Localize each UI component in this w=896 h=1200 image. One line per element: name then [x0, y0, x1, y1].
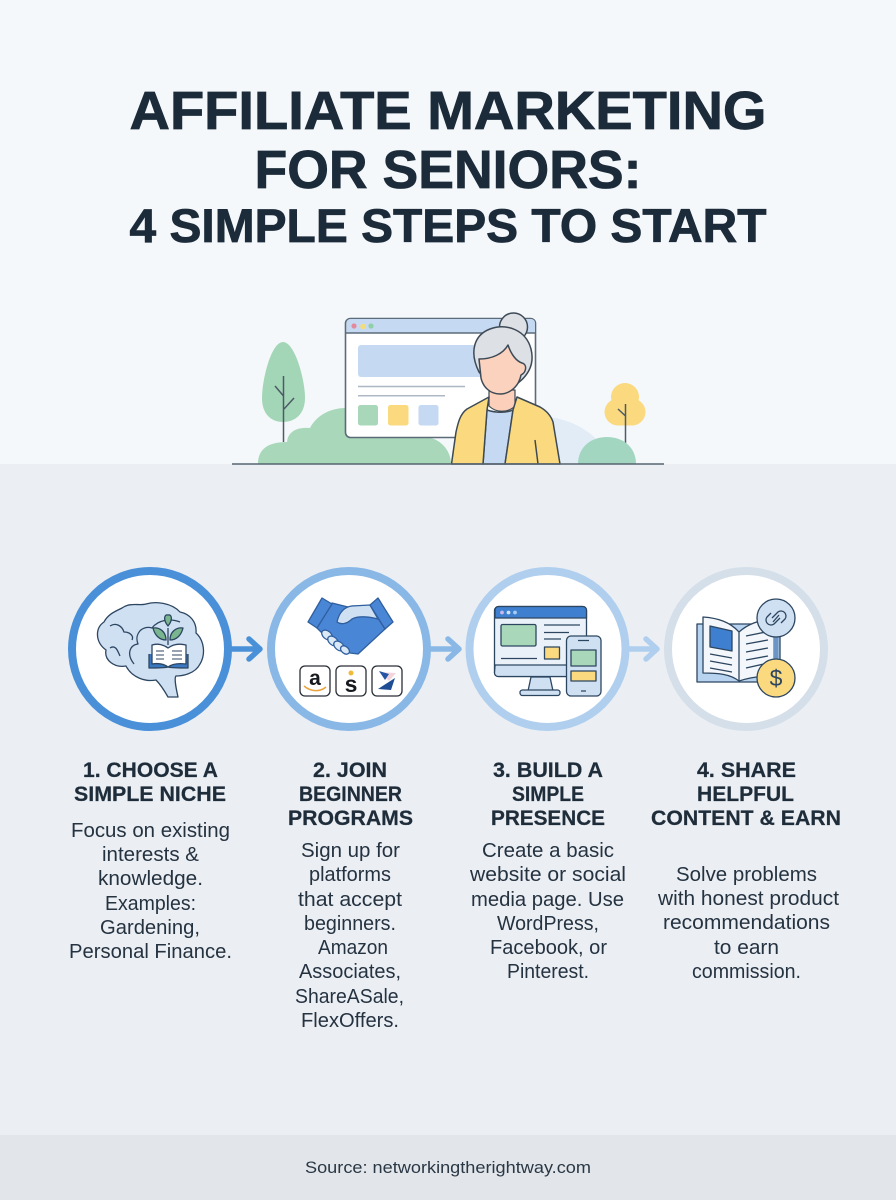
heading 2: 2. JOIN [313, 758, 387, 782]
body 1: Gardening, [100, 916, 200, 939]
body 1: interests & [102, 843, 199, 866]
tree left [262, 342, 305, 442]
icon: flexoffers logo [372, 666, 402, 696]
body 1: Personal Finance. [69, 940, 232, 963]
body 4: with honest product [657, 887, 839, 910]
heading 4 [651, 758, 841, 830]
heading 4: CONTENT & EARN [651, 806, 841, 830]
background: top panel [0, 0, 896, 464]
icon: amazon logo: a [309, 667, 321, 690]
body 3: Pinterest. [507, 960, 589, 983]
tree right [604, 383, 646, 443]
background: steps panel [0, 464, 896, 1135]
body 1 [69, 819, 232, 963]
body 2: FlexOffers. [301, 1009, 399, 1032]
icon: shareasale logo [336, 666, 366, 697]
illustration: senior woman with website [232, 313, 664, 464]
icon: book with link and dollar: $ [770, 665, 783, 691]
woman [452, 313, 560, 464]
circle 3 [470, 571, 626, 727]
title: FOR SENIORS: [254, 140, 642, 200]
step 2 [271, 571, 459, 1032]
footer band [0, 1135, 896, 1200]
body 3: Create a basic [482, 839, 614, 862]
icon: handshake [308, 598, 393, 656]
body 3: Facebook, or [490, 936, 607, 959]
body 2: Associates, [299, 960, 401, 983]
icon: monitor and phone [494, 606, 601, 696]
step 3 [469, 571, 657, 983]
browser window [346, 318, 536, 438]
heading 4: 4. SHARE [697, 758, 796, 782]
body 4: commission. [692, 960, 801, 983]
body 2: Amazon [318, 936, 388, 959]
title [130, 81, 767, 252]
bush left [258, 408, 451, 464]
heading 1: 1. CHOOSE A [83, 758, 218, 782]
title: 4 SIMPLE STEPS TO START [130, 199, 767, 252]
circle 1 [72, 571, 228, 727]
step 1 [69, 571, 260, 963]
body 3: WordPress, [497, 912, 599, 935]
body 1: knowledge. [98, 867, 203, 890]
body 2: ShareASale, [295, 985, 404, 1008]
body 4 [657, 863, 839, 983]
bush right [578, 437, 636, 464]
step 4 [651, 571, 841, 983]
heading 1: SIMPLE NICHE [74, 782, 226, 806]
title: AFFILIATE MARKETING [130, 81, 766, 141]
source text: Source: networkingtherightway.com [305, 1159, 591, 1177]
icon: book with link and dollar [697, 599, 795, 697]
body 3: media page. Use [471, 888, 624, 911]
heading 3: PRESENCE [491, 806, 605, 830]
icon: brain with book and sprout [97, 603, 203, 697]
body 2: platforms [309, 863, 391, 886]
icon: shareasale logo: s [345, 671, 357, 697]
body 2: Sign up for [301, 839, 400, 862]
circle 2 [271, 571, 427, 727]
circle 4 [668, 571, 824, 727]
arrow 1 [228, 639, 260, 659]
pale hill [535, 416, 606, 464]
body 4: Solve problems [676, 863, 817, 886]
icon: amazon logo [300, 666, 330, 696]
ground line [232, 463, 664, 465]
body 1: Focus on existing [71, 819, 230, 842]
arrow 3 [626, 639, 657, 659]
heading 2 [288, 758, 413, 830]
heading 1 [74, 758, 226, 806]
body 3 [469, 839, 626, 983]
heading 2: PROGRAMS [288, 806, 413, 830]
heading 2: BEGINNER [299, 782, 402, 806]
body 2: beginners. [304, 912, 396, 935]
heading 3: 3. BUILD A [493, 758, 603, 782]
arrow 2 [427, 639, 459, 659]
body 1: Examples: [105, 892, 196, 915]
heading 3: SIMPLE [512, 782, 584, 806]
heading 3 [491, 758, 605, 830]
heading 4: HELPFUL [697, 782, 794, 806]
body 2: that accept [298, 888, 402, 911]
body 3: website or social [469, 863, 626, 886]
body 2 [295, 839, 404, 1032]
body 4: recommendations [663, 911, 830, 934]
body 4: to earn [714, 936, 779, 959]
